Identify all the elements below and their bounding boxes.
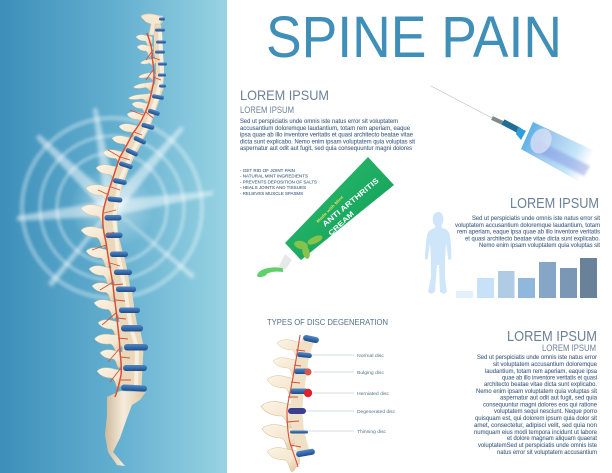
disc labels (357, 353, 396, 435)
title: SPINE PAIN (266, 5, 562, 70)
benefits list: - GET RID OF JOINT PAIN (240, 168, 296, 174)
subheading: LOREM IPSUM (240, 105, 294, 115)
spinal nerve (92, 33, 161, 397)
heading: LOREM IPSUM (510, 195, 599, 212)
paragraph (474, 355, 598, 456)
paragraph: voluptatemSed ut perspiciatis unde omnis iste (478, 443, 598, 449)
intervertebral discs (104, 18, 167, 392)
paragraph: ipsa quae ab illo inventore veritatis et quasi architecto beatae vitae (240, 132, 414, 138)
bulge (304, 368, 312, 376)
paragraph: numquam eius modi tempora incidunt ut labore (474, 430, 598, 436)
text block: top left (240, 87, 415, 152)
text block: middle right (455, 195, 600, 249)
text block: bottom right (474, 328, 598, 456)
paragraph: consequuntur magni dolores eos qui ratione (483, 402, 598, 408)
benefits list (240, 168, 317, 197)
leader lines (306, 355, 354, 431)
herniation (304, 389, 312, 397)
benefits list: - HEALS JOINTS AND TISSUES (240, 185, 306, 191)
paragraph: aspernatur aut odit aut fugit, sed quia (500, 396, 598, 402)
paragraph (455, 216, 600, 249)
benefits list: - PREVENTS DEPOSITION OF SALTS (240, 180, 317, 186)
disc degeneration diagram (261, 334, 396, 472)
paragraph: Sed ut perspiciatis unde omnis iste natus error sit voluptatem (240, 119, 398, 125)
nerve (287, 335, 305, 467)
vertebral body highlight (114, 30, 162, 388)
cream tube (257, 157, 394, 277)
hub (492, 118, 505, 124)
paragraph (240, 119, 415, 152)
heading: LOREM IPSUM (240, 87, 329, 103)
disc labels: Herniated disc (357, 391, 390, 397)
paragraph: Nemo enim ipsam voluptatem quia voluptas sit (479, 243, 600, 249)
benefits list: - NATURAL MINT INGREDIENTS (240, 174, 308, 180)
background panel (0, 0, 227, 473)
disc labels: Bulging disc (357, 370, 385, 376)
paragraph: quae ab illo inventore veritatis et quasi (502, 376, 597, 382)
disc degeneration title: TYPES OF DISC DEGENERATION (267, 317, 388, 327)
paragraph: et dolore magnam aliquam quaerat (507, 436, 597, 442)
heading: LOREM IPSUM (507, 328, 597, 345)
bar chart (456, 258, 597, 298)
disc labels: Normal disc (357, 353, 385, 359)
paragraph: et quasi architecto beatae vitae dicta sunt explicabo. (465, 236, 600, 242)
tube label: Made with Mint (315, 194, 345, 224)
paragraph: sit voluptatem accusantium doloremque (493, 362, 598, 368)
paragraph: quisquam est, qui dolorem ipsum quia dolor sit (475, 416, 597, 422)
human silhouette (425, 212, 451, 294)
paste (257, 267, 283, 277)
paragraph: aspernatur aut odit aut fugit, sed quia consequuntur magni dolores (240, 146, 412, 152)
paragraph: laudantium, totam rem aperiam, eaque ipsa (485, 369, 598, 375)
disc labels: Thinning disc (357, 429, 387, 435)
paragraph: Sed ut perspiciatis unde omnis iste natus error sit (472, 216, 600, 222)
needle (431, 86, 492, 118)
paragraph: voluptatem sequi nesciunt. Neque porro (494, 409, 598, 415)
tube label: CREAM (328, 210, 356, 237)
paragraph: Sed ut perspiciatis unde omnis iste natus error (477, 355, 597, 361)
paragraph: voluptatem accusantium doloremque laudantium, totam (455, 223, 600, 229)
atlas (141, 14, 163, 35)
leaf (293, 233, 324, 260)
benefits list: - RELIEVES MUSCLE SPASMS (240, 191, 303, 197)
spine illustration (81, 14, 167, 466)
paragraph: accusantium doloremque laudantium, totam rem aperiam, eaque (240, 126, 411, 132)
subheading: LOREM IPSUM (542, 343, 596, 353)
disc labels: Degenerated disc (357, 409, 396, 415)
tip (516, 127, 526, 140)
paragraph: natus error sit voluptatem accusantium (497, 450, 597, 456)
syringe (431, 86, 597, 182)
vertebral processes (81, 14, 163, 388)
tube body (285, 157, 394, 260)
connector (503, 122, 520, 131)
discs (288, 334, 319, 458)
tube label (315, 176, 381, 237)
paragraph: Nemo enim ipsam voluptatem quia voluptas sit (476, 389, 597, 395)
paragraph: amet, consectetur, adipisci velit, sed quia non (474, 423, 597, 429)
vertebral bodies (110, 16, 160, 388)
barrel (521, 122, 597, 182)
vertebral column (296, 338, 309, 453)
paragraph: architecto beatae vitae dicta sunt explicabo. (484, 382, 597, 388)
tube label: ANTI ARTHRITIS (321, 176, 381, 229)
nozzle (279, 254, 292, 270)
plunger highlight (526, 125, 556, 157)
processes (261, 340, 304, 472)
paragraph: rem aperiam, eaque ipsa quae ab illo inventore veritatis (457, 230, 600, 236)
liquid band (532, 140, 590, 176)
pain sunburst (17, 108, 213, 298)
sacrum (105, 391, 146, 466)
paragraph: dicta sunt explicabo. Nemo enim ipsam voluptatem quia voluptas sit (240, 140, 415, 146)
